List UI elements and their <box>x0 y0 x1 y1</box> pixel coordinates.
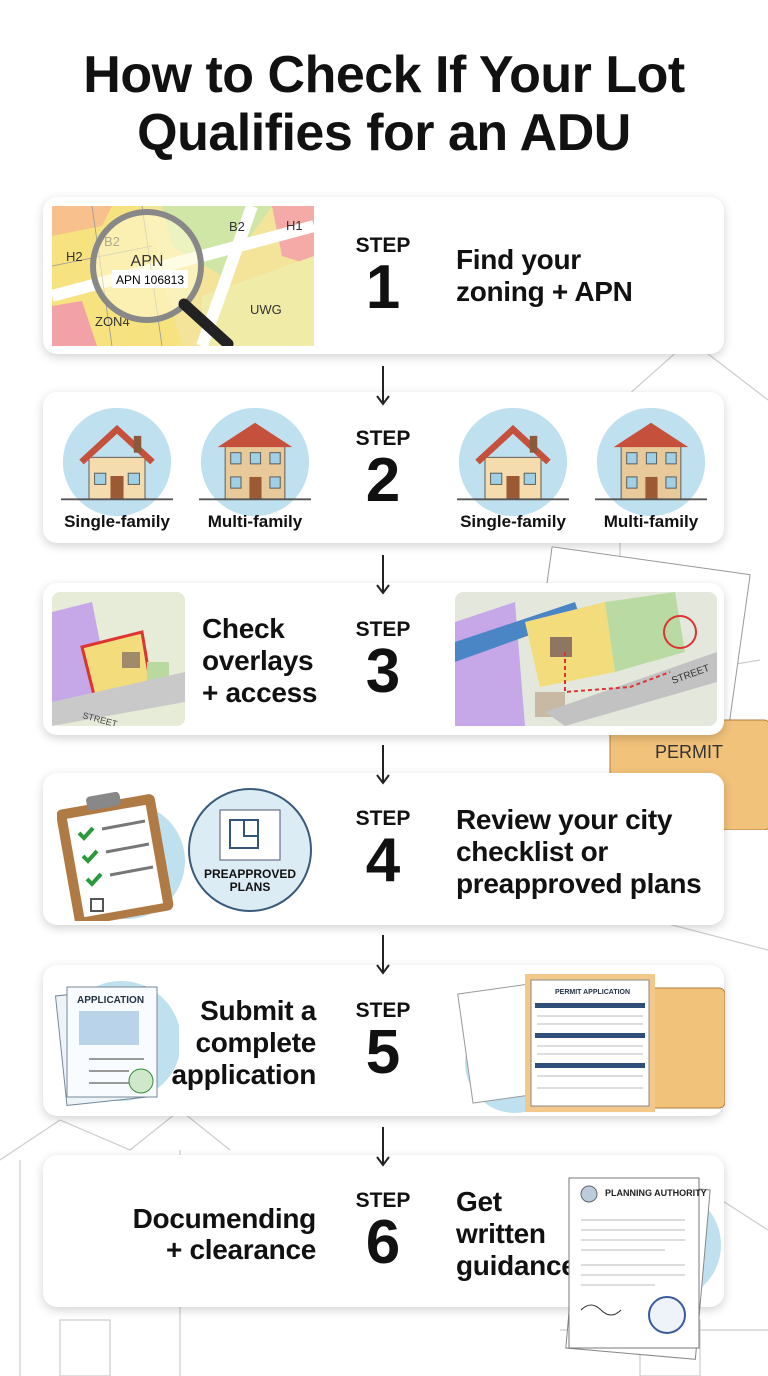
step 3 text: + access <box>202 677 317 708</box>
step label 1: STEP <box>356 234 410 257</box>
icon: multi-family house A <box>199 408 311 516</box>
step 6 left text: Documending <box>133 1203 316 1234</box>
step 4 text: checklist or <box>456 836 608 867</box>
step 3 text: Check <box>202 613 285 644</box>
labels left: Single-family <box>64 512 170 531</box>
step 6 right text <box>456 1186 577 1281</box>
zoning map with magnifier: B2 <box>104 234 120 249</box>
panel: step 2: Single-family <box>460 512 566 531</box>
step label 3 <box>356 618 410 706</box>
step 3 text: overlays <box>202 645 313 676</box>
zoning map with magnifier: APN 106813 <box>116 273 184 287</box>
title <box>83 46 685 162</box>
zoning map with magnifier: H2 <box>66 249 83 264</box>
panel: step 2: Multi-family <box>604 512 698 531</box>
step label 6: STEP <box>356 1189 410 1212</box>
panel: step 2: Multi-family <box>208 512 302 531</box>
step label 6: 6 <box>366 1208 400 1277</box>
decorative: folder behind step 3-4: PERMIT <box>655 742 723 762</box>
icon: permit forms and folder: PERMIT APPLICATION <box>555 989 630 996</box>
icon: multi-family house B <box>595 408 707 516</box>
icon: preapproved plans: PLANS <box>230 880 270 894</box>
step label 1 <box>356 234 410 322</box>
icon: preapproved plans: PREAPPROVED <box>204 867 296 881</box>
step label 4: STEP <box>356 807 410 830</box>
step 4 text: preapproved plans <box>456 868 701 899</box>
icon: clipboard checklist <box>57 792 185 921</box>
zoning map with magnifier: APN <box>131 253 163 270</box>
arrow 2 <box>376 555 390 594</box>
step 5 text: application <box>172 1059 316 1090</box>
icon: permit forms and folder <box>457 974 725 1113</box>
step 6 right text: guidance <box>456 1250 577 1281</box>
icon: application document: APPLICATION <box>77 995 144 1006</box>
icon: single-family house B <box>457 408 569 516</box>
panel: step 5 <box>43 965 724 1116</box>
arrow 1 <box>376 366 390 406</box>
zoning map with magnifier: UWG <box>250 302 282 317</box>
step 5 text <box>172 995 316 1090</box>
step 6 right text: Get <box>456 1186 502 1217</box>
panel: step 2 <box>43 392 724 543</box>
arrow 3 <box>376 745 390 784</box>
icon: planning authority letter <box>565 1178 721 1360</box>
zoning map with magnifier: H1 <box>286 218 303 233</box>
step label 5 <box>356 999 410 1087</box>
panel: step 3 <box>43 583 724 735</box>
step label 4 <box>356 807 410 895</box>
panel: step 6 <box>43 1155 724 1307</box>
decorative: folder behind step 3-4 <box>546 546 768 830</box>
step 6 right text: written <box>456 1218 546 1249</box>
step label 5: STEP <box>356 999 410 1022</box>
step 1 text: zoning + APN <box>456 276 633 307</box>
title: Qualifies for an ADU <box>137 104 631 162</box>
zoning map with magnifier <box>52 206 314 346</box>
icon: single-family house A <box>61 408 173 516</box>
step 3 text <box>202 613 317 708</box>
step label 5: 5 <box>366 1018 400 1087</box>
step 4 text: Review your city <box>456 804 672 835</box>
step 6 left text: + clearance <box>166 1234 316 1265</box>
step label 2: STEP <box>356 427 410 450</box>
step label 6 <box>356 1189 410 1277</box>
step label 2 <box>356 427 410 515</box>
step label 4: 4 <box>366 826 400 895</box>
title: How to Check If Your Lot <box>83 46 685 104</box>
step 6 left text <box>133 1203 316 1265</box>
step 5 text: Submit a <box>200 995 316 1026</box>
step label 1: 1 <box>366 253 400 322</box>
panel: step 4 <box>43 773 724 925</box>
map: access right <box>455 592 717 726</box>
zoning map with magnifier: ZON4 <box>95 314 130 329</box>
step 4 text <box>456 804 701 899</box>
icon: application document <box>55 981 179 1106</box>
step label 3: 3 <box>366 637 400 706</box>
step label 2: 2 <box>366 446 400 515</box>
panel: step 1 <box>43 197 724 354</box>
arrow 4 <box>376 935 390 974</box>
map: overlays left <box>52 592 185 726</box>
step 5 text: complete <box>195 1027 316 1058</box>
icon: planning authority letter: PLANNING AUTHORITY <box>605 1188 707 1198</box>
icon: preapproved plans <box>188 788 312 912</box>
arrow 5 <box>376 1127 390 1166</box>
zoning map with magnifier: B2 <box>229 219 245 234</box>
map: access right: STREET <box>670 663 711 687</box>
step 1 text: Find your <box>456 244 581 275</box>
step label 3: STEP <box>356 618 410 641</box>
step 1 text <box>456 244 633 307</box>
